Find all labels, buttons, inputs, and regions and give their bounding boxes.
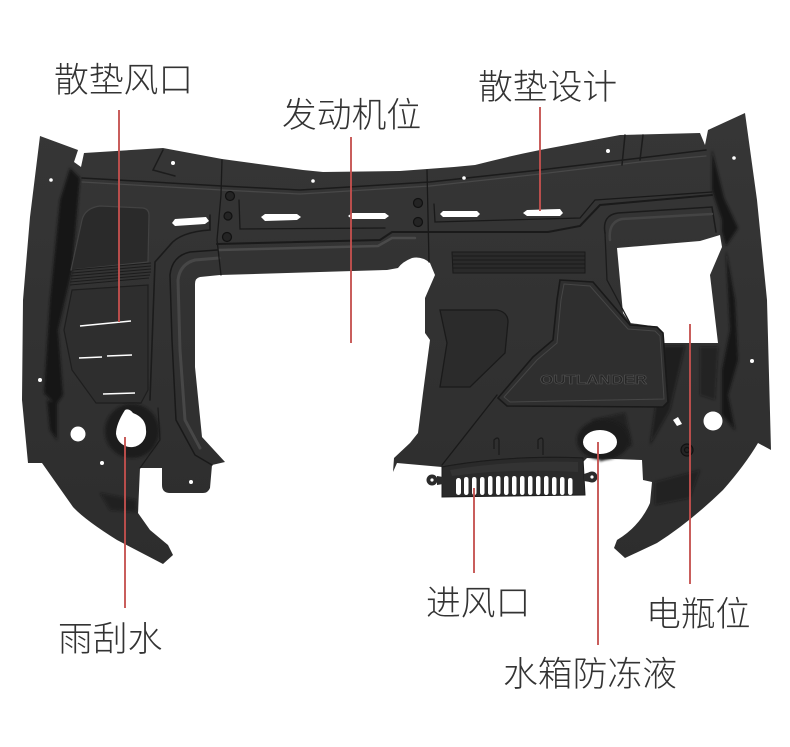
- mounting ears: [426, 474, 438, 486]
- coolant recess: [577, 420, 629, 460]
- label: 散垫设计: 散垫设计: [478, 68, 617, 107]
- label: 雨刮水: 雨刮水: [58, 620, 162, 659]
- wiper recess: [105, 404, 159, 458]
- cover silhouette: [22, 113, 771, 564]
- left ribbed band: [70, 263, 151, 285]
- label: 电瓶位: 电瓶位: [646, 595, 750, 634]
- left lower raised panel: [64, 285, 148, 403]
- dark channels: [44, 150, 738, 512]
- ridges and grooves: [82, 135, 716, 468]
- label: 散垫风口: 散垫风口: [54, 61, 193, 100]
- small left plate: [440, 310, 508, 387]
- OUTLANDER logo: OUTLANDER: [540, 373, 647, 387]
- label: 发动机位: 发动机位: [282, 96, 421, 135]
- white openings: [38, 149, 754, 484]
- vent housing: [426, 438, 598, 497]
- right ribbed block: [452, 252, 585, 273]
- bolts: [222, 192, 693, 456]
- thin white slits: [79, 321, 135, 394]
- label: 水箱防冻液: 水箱防冻液: [503, 655, 677, 694]
- label: 进风口: 进风口: [426, 584, 530, 623]
- intake grille slits: [456, 476, 572, 495]
- left upper raised panel: [71, 206, 149, 270]
- leader lines: [119, 107, 690, 645]
- engine undercover product: [22, 113, 771, 564]
- OUTLANDER plate: [498, 280, 668, 407]
